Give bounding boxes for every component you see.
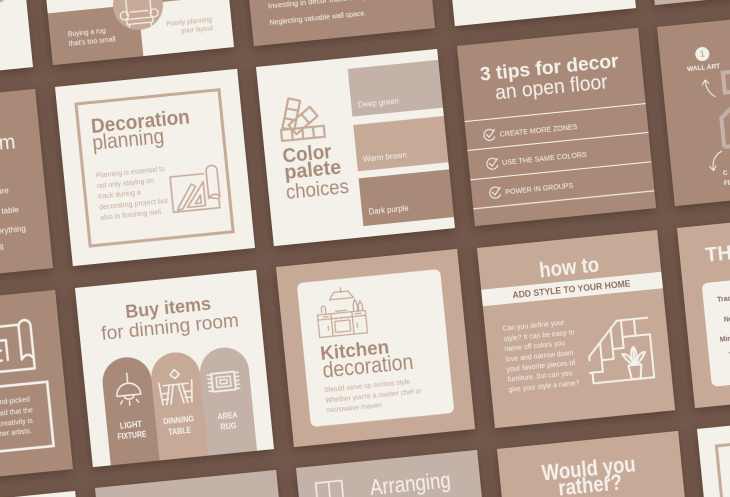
brown quadrant right xyxy=(134,0,229,4)
arch: dinning table: TABLE xyxy=(168,426,192,437)
panel: kitchen decoration xyxy=(276,249,475,447)
circle badge with sofa icon xyxy=(111,0,165,32)
arch: area rug: RUG xyxy=(220,421,237,432)
heading: choices: choices xyxy=(285,176,350,204)
body text xyxy=(96,164,170,222)
heading light: an open floor xyxy=(494,71,609,104)
body text xyxy=(324,376,423,415)
panel: top-left cream card xyxy=(0,0,33,85)
text: list item wall space: Neglecting valuable wall space. xyxy=(269,8,367,27)
arch: light fixture: LIGHT xyxy=(120,420,142,431)
label: lower: C xyxy=(723,170,728,177)
tip 2: USE THE SAME COLORS xyxy=(502,152,587,167)
panel: left dining room checklist card xyxy=(0,89,53,286)
text: poor layout line 2: your layout xyxy=(181,23,214,35)
arch: dinning table xyxy=(149,350,208,460)
panel: decoration planning xyxy=(55,69,255,266)
tip 1: CREATE MORE ZONES xyxy=(500,124,578,139)
swatch: dark purple xyxy=(359,169,454,226)
heading light: for dinning room xyxy=(100,310,240,345)
text: poor layout: Poorly planning xyxy=(166,15,213,28)
heading light: decoration xyxy=(321,349,414,383)
panel: 3 tips for decor xyxy=(457,28,656,226)
panel: would you rather xyxy=(497,431,696,497)
icon: blueprint xyxy=(0,320,35,375)
text: table: table xyxy=(1,205,20,216)
text: too small rug line 2: that's too small xyxy=(68,34,116,48)
text frame xyxy=(0,382,54,461)
heading bold: Buy items xyxy=(124,294,212,322)
body text: also to finishing well. xyxy=(100,207,163,222)
icon: staircase with plant xyxy=(585,317,654,384)
inner rounded card xyxy=(297,269,454,427)
panel: arranging card xyxy=(296,450,495,497)
label: wall art: WALL ART xyxy=(687,63,720,73)
number badge: 1 xyxy=(700,50,706,59)
body text: love and narrow down xyxy=(505,348,574,363)
panel: bottom-left cream card xyxy=(0,491,93,497)
heading: how to xyxy=(538,253,600,282)
panel: how to add style xyxy=(477,230,675,428)
tip 1 xyxy=(483,121,578,141)
swatch label: warm brown: Warm brown xyxy=(363,151,407,164)
body text: Planning is essential to xyxy=(96,164,165,180)
arch: area rug: AREA xyxy=(217,410,238,421)
panel: bottom right cream card xyxy=(697,411,730,497)
panel: the styles list xyxy=(677,210,730,408)
arch: area rug xyxy=(198,345,257,456)
banner xyxy=(481,272,663,306)
swatch label: deep green: Deep green xyxy=(358,96,399,109)
panel: wall art room guide xyxy=(657,9,730,206)
icon: blueprint and ruler xyxy=(169,165,221,212)
swatch: deep green xyxy=(348,60,443,117)
heading: color: Color xyxy=(282,141,333,168)
heading line 1: Would you xyxy=(541,451,637,486)
banner text: ADD STYLE TO YOUR HOME xyxy=(512,278,631,300)
body text: furniture, but can you xyxy=(507,368,573,384)
arrow down xyxy=(708,151,723,171)
body text: Should serve up serious style. xyxy=(324,377,412,394)
brown quadrant left xyxy=(48,4,143,65)
arrow up xyxy=(702,79,715,98)
icon: colour fan deck xyxy=(278,95,325,141)
arch: light fixture: FIXTURE xyxy=(117,430,147,441)
panel: decor mistakes list card xyxy=(236,0,435,46)
body text: Whether you're a master chef or xyxy=(325,386,422,405)
panel: color palette choices xyxy=(256,49,455,246)
icon: door xyxy=(316,481,345,497)
panel: left blueprint card xyxy=(0,290,73,487)
number badge xyxy=(695,46,710,62)
tip 3: POWER IN GROUPS xyxy=(505,183,574,196)
inner card xyxy=(702,269,730,387)
heading light: planning xyxy=(91,125,165,155)
body text: your favorite pieces of xyxy=(506,358,577,374)
swatch: warm brown xyxy=(353,116,448,171)
body text: style? It can be easy to xyxy=(503,327,575,343)
frame xyxy=(716,432,730,497)
panel: top right mauve card xyxy=(637,0,730,5)
icon: kitchen xyxy=(315,285,367,338)
body text: track during a xyxy=(98,188,142,201)
heading: palete: palete xyxy=(283,156,342,184)
body text: decorating project but xyxy=(99,196,169,211)
body text: name off colors you xyxy=(504,338,566,353)
body text: microwave maven xyxy=(326,400,382,415)
tip 2 xyxy=(486,149,588,170)
panel: rug mistakes card xyxy=(35,0,234,65)
arch: light fixture xyxy=(100,355,160,465)
heading bold: Decoration xyxy=(90,106,191,138)
heading bold: Kitchen xyxy=(319,337,390,365)
body text: give your style a name? xyxy=(508,378,580,394)
heading bold: 3 tips for decor xyxy=(479,51,620,86)
body text xyxy=(502,317,580,394)
body text: Can you define your xyxy=(502,318,565,333)
arch: dinning table: DINNING xyxy=(163,414,195,426)
tip 3 xyxy=(489,179,574,199)
frame xyxy=(76,90,233,246)
furniture illustration xyxy=(717,70,730,147)
text: too small rug: Buying a rug xyxy=(67,26,106,39)
body text: not only staying on xyxy=(97,176,154,190)
panel: top cream card xyxy=(437,0,636,26)
panel: buy items for dining room xyxy=(75,270,274,467)
swatch label: dark purple: Dark purple xyxy=(368,204,410,217)
panel: bottom mauve card xyxy=(95,470,294,497)
